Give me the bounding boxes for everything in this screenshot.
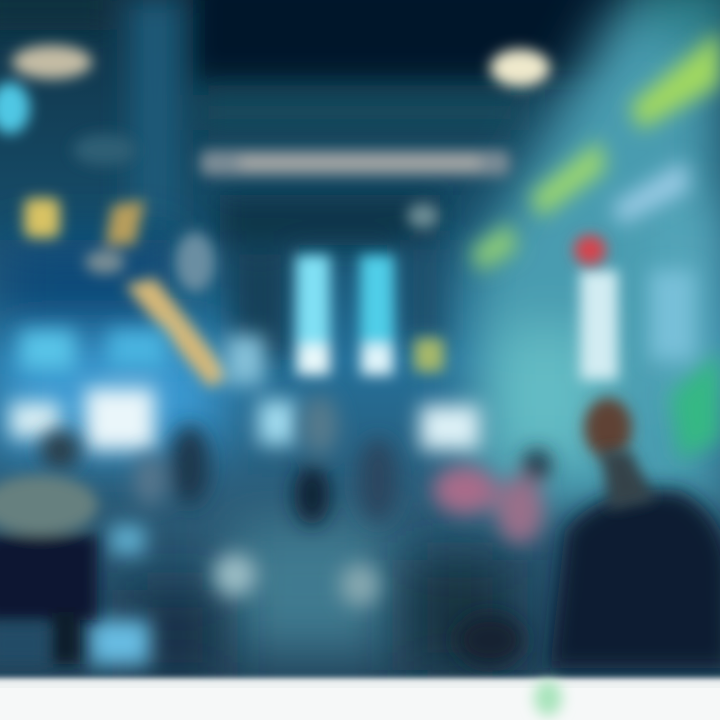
person in foreground, right: [550, 398, 720, 668]
ceiling lights: [0, 45, 550, 134]
crowd silhouettes: [40, 395, 551, 666]
left wall: blue glow: [0, 240, 390, 650]
body: [550, 490, 720, 668]
floor shadows: [130, 560, 510, 680]
bright screens left: [10, 330, 480, 665]
floor strip at the bottom: [0, 678, 720, 720]
head: [584, 398, 632, 458]
right wall: teal panels: [470, 0, 720, 520]
red marker: [574, 235, 606, 265]
green accent: [534, 680, 562, 716]
light columns: [296, 255, 618, 380]
overhead sign strip: [73, 134, 510, 229]
ceiling: dark upper band: [0, 0, 630, 360]
yellow markers and diagonal beam: [24, 198, 444, 388]
right wall: green signs: [470, 30, 720, 460]
neck and hair: [600, 450, 655, 510]
person in foreground, left: [0, 475, 98, 664]
